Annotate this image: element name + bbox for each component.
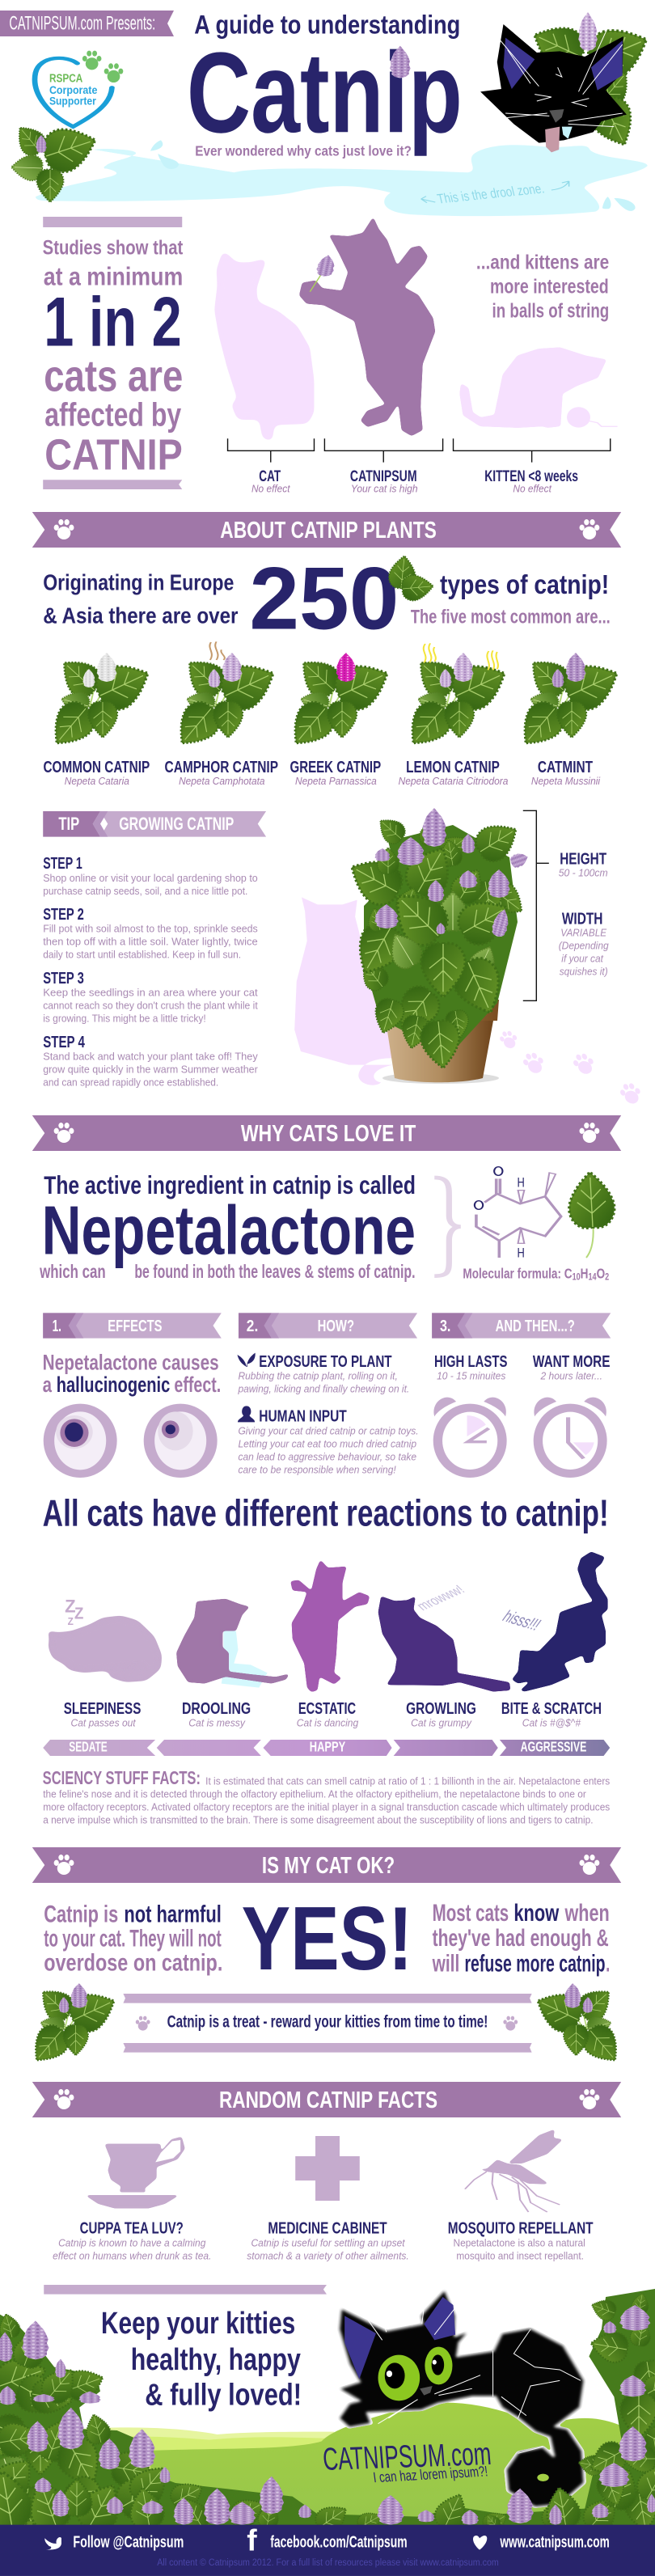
RSPCA corporate supporter badge: Corporate [49, 83, 97, 96]
step 2: then top off with a little soil. Water lightly, twice [43, 935, 258, 948]
section banner: random catnip facts [32, 2082, 621, 2117]
plant size annotation: WIDTH [562, 909, 602, 928]
cat comparison brackets and labels [228, 438, 611, 494]
cat comparison brackets and labels: Your cat is high [351, 484, 418, 494]
molecular formula: 14 [589, 1272, 597, 1283]
panel: 250 types of catnip [43, 550, 611, 648]
potted catnip plant [341, 808, 530, 1084]
icon: mosquito [465, 2129, 563, 2212]
reaction scale arrows [43, 1739, 610, 1756]
plant size annotation: squishes it) [560, 967, 608, 977]
human input: care to be responsible when serving! [238, 1465, 396, 1475]
section banner: is my cat ok: IS MY CAT OK? [262, 1852, 395, 1878]
human input [238, 1406, 419, 1475]
ribbon: how [239, 1313, 417, 1339]
bottom ribbon bar [43, 480, 182, 489]
treat callout [123, 1994, 532, 2053]
silhouette: sitting cat [215, 252, 313, 441]
panel: reactions [43, 1491, 610, 1826]
main title [187, 11, 463, 159]
cat comparison brackets and labels: CAT [259, 467, 281, 485]
kittens note [476, 251, 609, 322]
left statement: Catnip is [44, 1901, 118, 1928]
fact: medicine cabinet: stomach & a variety of other ailments. [247, 2251, 409, 2261]
plant size annotation [523, 810, 609, 1000]
plant: greek catnip [281, 650, 396, 755]
drool zone puddle [36, 140, 648, 216]
catnip type labels [43, 758, 601, 787]
plant: lemon catnip [399, 643, 513, 755]
right statement: will [432, 1950, 459, 1977]
reaction labels: Cat is dancing [297, 1718, 359, 1729]
header banner: presents [0, 11, 174, 36]
icon: twitter bird [44, 2537, 61, 2550]
icon: alarm clock two [534, 1398, 607, 1478]
molecule diagram [475, 1167, 561, 1260]
closing scene hills [79, 2403, 655, 2525]
cat head with leaves [480, 12, 655, 154]
icon: catnip sprig left [11, 120, 102, 202]
right statement: know [513, 1900, 559, 1927]
footer bar: Follow @Catnipsum [73, 2532, 184, 2551]
icon: shrunken eye [144, 1404, 218, 1478]
molecular formula: H [581, 1266, 589, 1281]
silhouette: sleeping cat: Z [65, 1597, 76, 1617]
catnip type labels: Nepeta Camphotata [179, 776, 265, 787]
want more: 2 hours later... [540, 1371, 602, 1381]
fact: cuppa tea: Catnip is known to have a calming [58, 2238, 206, 2248]
silhouette: hissing cat [499, 1551, 608, 1692]
reaction scale arrows: SEDATE [69, 1739, 108, 1754]
exposure to plant: Rubbing the catnip plant, rolling on it, [238, 1371, 398, 1381]
ribbon: effects: EFFECTS [108, 1317, 162, 1335]
icon: medical cross [295, 2136, 360, 2201]
effects statement: a [43, 1373, 52, 1397]
fact: medicine cabinet [247, 2219, 409, 2261]
panel: is my cat ok [44, 1888, 610, 2053]
closing message: Keep your kitties [101, 2305, 295, 2340]
plant: camphor catnip [167, 641, 282, 755]
fact: cuppa tea: CUPPA TEA LUV? [80, 2219, 184, 2237]
text: I can haz lorem ipsum?! [372, 2463, 488, 2485]
right statement: Most cats [433, 1900, 509, 1927]
section banner: why cats love it [32, 1115, 621, 1151]
step 4 [43, 1033, 258, 1089]
human input: Giving your cat dried catnip or catnip toys. [238, 1426, 419, 1436]
catnip type labels: COMMON CATNIP [43, 758, 150, 776]
step 3: cannot reach so they don't crush the plant while it [43, 999, 258, 1012]
panel: random facts [44, 2129, 594, 2295]
molecular formula: O [597, 1266, 605, 1281]
panel: effects [43, 1313, 611, 1478]
big number 250: 250 [249, 550, 399, 648]
big word: yes: YES! [242, 1888, 412, 1989]
statistic text: affected by [44, 397, 181, 434]
text: CATNIPSUM.com Presents: [9, 12, 155, 34]
silhouette: sleeping cat: Z [68, 1615, 74, 1627]
top ribbon bar [43, 217, 182, 227]
catnip type labels: Nepeta Cataria [65, 776, 129, 787]
tip ribbon [43, 811, 266, 837]
fact: cuppa tea [53, 2219, 211, 2261]
cat comparison brackets and labels: No effect [251, 484, 291, 494]
catnip type labels: Nepeta Cataria Citriodora [399, 776, 508, 787]
right statement [432, 1900, 610, 1977]
step 2 [43, 905, 258, 961]
exposure to plant: EXPOSURE TO PLANT [259, 1352, 392, 1371]
icon: heart [473, 2536, 487, 2550]
sciency stuff facts: SCIENCY STUFF FACTS: [43, 1768, 201, 1788]
step 3 [43, 969, 258, 1025]
ribbon: effects: 1. [53, 1317, 61, 1335]
silhouette: dancing cat with flower [300, 218, 434, 435]
tip ribbon: TIP [58, 814, 79, 834]
sciency stuff facts [43, 1768, 610, 1826]
step 4: and can spread rapidly once established. [43, 1076, 218, 1089]
step 3: STEP 3 [43, 969, 84, 988]
statistic text: 1 in 2 [44, 282, 182, 361]
section banner: about catnip plants [32, 512, 621, 548]
molecule diagram: H [518, 1245, 525, 1260]
human input: Letting your cat eat too much dried catnip [238, 1439, 416, 1449]
step 2: Fill pot with soil almost to the top, sprinkle seeds [43, 922, 258, 935]
fact: medicine cabinet: Catnip is useful for settling an upset [251, 2238, 406, 2248]
cat comparison brackets and labels: No effect [513, 484, 552, 494]
silhouette: cat behind pot [294, 897, 393, 1085]
plant: common catnip [42, 650, 157, 755]
reaction labels: GROWLING [406, 1699, 476, 1718]
fact: cuppa tea: effect on humans when drunk as tea. [53, 2251, 211, 2261]
reaction labels: Cat passes out [71, 1718, 137, 1729]
panel: one in two cats [43, 217, 618, 489]
statistic text: cats are [44, 351, 183, 401]
molecule diagram: H [518, 1174, 525, 1190]
left statement [44, 1901, 222, 1977]
paw prints [498, 1030, 644, 1105]
plant size annotation: (Depending [559, 941, 609, 951]
section banner: why cats love it: WHY CATS LOVE IT [241, 1120, 416, 1146]
left statement: overdose on catnip. [44, 1950, 222, 1977]
statistic text: Studies show that [43, 235, 183, 259]
icon: dilated eye [44, 1404, 117, 1478]
step 4: STEP 4 [43, 1033, 85, 1051]
reaction labels: DROOLING [182, 1699, 251, 1718]
origin text [43, 570, 239, 628]
closing message [101, 2305, 302, 2412]
effects statement: hallucinogenic [57, 1373, 170, 1397]
closing message: healthy, happy [131, 2341, 301, 2376]
human input: can lead to aggressive behaviour, so take [238, 1452, 416, 1462]
catnip type labels: Nepeta Mussinii [531, 776, 601, 787]
icon: alarm clock one [433, 1398, 507, 1478]
silhouette: sleeping cat: Z [74, 1604, 83, 1622]
icon: tea cup [85, 2137, 185, 2209]
silhouette: hissing cat: hisss!!! [499, 1607, 545, 1634]
text: . [606, 1950, 610, 1977]
effects statement: Nepetalactone causes [43, 1351, 219, 1374]
human input: HUMAN INPUT [259, 1406, 347, 1425]
catnip type labels: LEMON CATNIP [406, 758, 500, 776]
step 1: purchase catnip seeds, soil, and a nice little pot. [43, 885, 247, 897]
cat comparison brackets and labels: CATNIPSUM [350, 467, 417, 485]
panel: is my cat ok: not harmful [124, 1901, 222, 1928]
icon: facebook: f [247, 2524, 258, 2557]
catnip type labels: CATMINT [538, 758, 593, 776]
icon: flower on i [390, 46, 411, 78]
ribbon: how: 2. [247, 1317, 258, 1335]
reaction labels: Cat is #@$^# [522, 1718, 581, 1729]
plant size annotation: VARIABLE [560, 928, 607, 938]
icon: leaves on 250 [388, 554, 434, 602]
silhouette: growling cat: mrowww! [413, 1583, 468, 1614]
subtitle: Ever wondered why cats just love it? [195, 142, 412, 159]
silhouette: sleeping cat [44, 1597, 162, 1682]
silhouette: ecstatic cat [290, 1559, 370, 1692]
panel: effects: effect. [174, 1373, 221, 1397]
want more [533, 1352, 610, 1381]
step 2: STEP 2 [43, 905, 84, 924]
RSPCA corporate supporter badge: RSPCA [49, 72, 82, 85]
section banner: is my cat ok [32, 1847, 621, 1883]
plant left of callout [24, 1982, 122, 2071]
plant size annotation: HEIGHT [560, 849, 606, 868]
tip ribbon: GROWING CATNIP [119, 814, 234, 834]
icon: single catnip leaf [567, 1171, 615, 1258]
silhouette: kitten with ball [460, 348, 618, 428]
catnip type labels: GREEK CATNIP [290, 758, 381, 776]
catnip type labels: CAMPHOR CATNIP [165, 758, 278, 776]
RSPCA corporate supporter badge [35, 51, 123, 127]
effects statement [43, 1351, 221, 1397]
reaction scale arrows: HAPPY [310, 1739, 345, 1754]
plant size annotation: 50 - 100cm [559, 868, 608, 878]
molecular formula: 10 [573, 1272, 581, 1283]
ribbon: and then [432, 1313, 611, 1339]
statistic text: CATNIP [44, 430, 183, 479]
brace [434, 1178, 461, 1276]
origin text: Originating in Europe [43, 570, 234, 594]
statistic text [43, 235, 183, 479]
exposure to plant [237, 1352, 409, 1394]
reaction labels: ECSTATIC [298, 1699, 356, 1718]
footer bar [0, 2524, 655, 2576]
silhouette: growling cat [378, 1583, 510, 1692]
step 1: Shop online or visit your local gardening shop to [43, 872, 258, 884]
panel: nepetalactone [40, 1167, 609, 1283]
ribbon: effects [43, 1313, 222, 1339]
molecular formula: 2 [605, 1272, 609, 1283]
closing message: & fully loved! [145, 2377, 302, 2412]
panel: effects: HIGH LASTS [434, 1352, 507, 1371]
reaction labels: SLEEPINESS [64, 1699, 141, 1718]
step 2: daily to start until established. Keep in full sun. [43, 948, 241, 961]
step 3: Keep the seedlings in an area where your cat [43, 986, 258, 999]
statistic text: at a minimum [44, 262, 183, 291]
drool zone note [421, 180, 569, 206]
step 4: grow quite quickly in the warm Summer weather [43, 1063, 258, 1076]
ribbon: how: HOW? [318, 1317, 354, 1335]
reaction labels [64, 1699, 602, 1729]
high lasts: 10 - 15 minuites [437, 1371, 505, 1381]
footer bar: facebook.com/Catnipsum [270, 2532, 408, 2551]
closing ribbon bar [44, 2285, 327, 2295]
silhouette: drooling cat [176, 1599, 289, 1688]
step 3: is growing. This might be a little tricky! [43, 1012, 206, 1025]
step 4: Stand back and watch your plant take off! They [43, 1050, 258, 1063]
drool zone note: This is the drool zone. [436, 180, 546, 206]
step 1: STEP 1 [43, 854, 82, 873]
fact: mosquito repellant [448, 2219, 594, 2261]
fact: medicine cabinet: MEDICINE CABINET [268, 2219, 387, 2237]
panel: growing catnip tips [43, 811, 644, 1105]
panel: is my cat ok: to your cat. They will not [44, 1926, 222, 1952]
reaction labels: Cat is grumpy [411, 1718, 472, 1729]
high lasts [434, 1352, 507, 1381]
origin text: & Asia there are over [43, 603, 239, 628]
plant size annotation: if your cat [561, 954, 604, 964]
panel: nepetalactone: which can [40, 1261, 106, 1282]
RSPCA corporate supporter badge: Supporter [49, 94, 96, 107]
catnipsum logo text [322, 2436, 492, 2485]
exposure to plant: pawing, licking and finally chewing on it. [238, 1384, 409, 1394]
plant right of callout [530, 1982, 628, 2071]
plant: catmint [511, 650, 626, 755]
catnip bushes along bottom and sides [0, 2289, 655, 2539]
step 1 [43, 854, 258, 897]
catnip type labels: Nepeta Parnassica [295, 776, 377, 787]
ribbon: and then: 3. [440, 1317, 450, 1335]
black kitten mascot [338, 2289, 585, 2507]
section banner: random catnip facts: RANDOM CATNIP FACTS [219, 2087, 437, 2113]
section banner: about catnip plants: ABOUT CATNIP PLANTS [220, 517, 437, 543]
reaction labels: Cat is messy [188, 1718, 246, 1729]
